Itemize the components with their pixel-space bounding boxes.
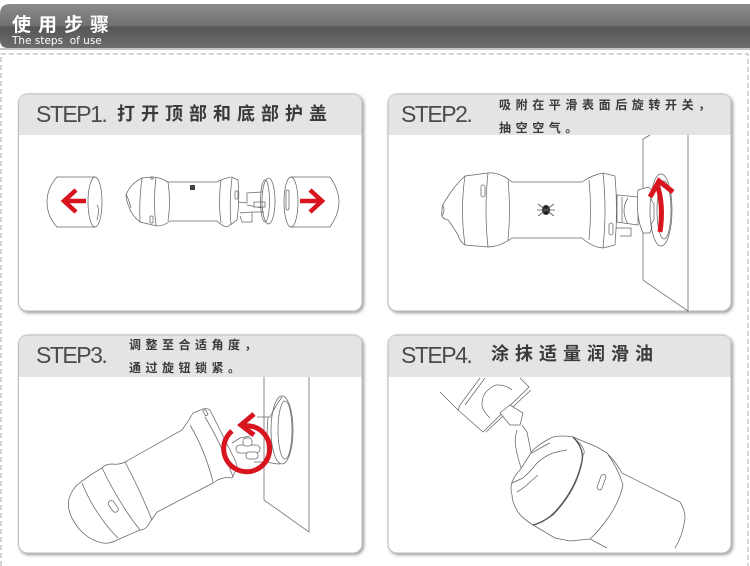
illustration: tilted device — [68, 409, 270, 543]
step 1 heading: 打开顶部和底部护盖 — [117, 103, 333, 124]
step 4 heading — [401, 342, 659, 368]
step 2 heading: STEP2. — [401, 101, 471, 127]
illustration: suction cup — [254, 396, 293, 464]
panel: step 4 — [388, 335, 731, 553]
illustration: device on wall — [442, 173, 673, 248]
step 1 heading — [36, 101, 333, 127]
step 4 heading: 涂抹适量润滑油 — [491, 343, 659, 364]
panel: step 1 — [18, 94, 362, 311]
illustration: left cap with arrow — [47, 177, 102, 227]
step 2 heading: 吸附在平滑表面后旋转开关， — [499, 97, 715, 112]
arrow: rotate tighten — [224, 414, 270, 472]
step 3 heading — [36, 337, 261, 375]
step 1 heading: STEP1. — [36, 101, 106, 127]
illustration: device being lubricated — [511, 436, 685, 548]
step 2 heading — [401, 97, 715, 135]
illustration: right cap with arrow — [284, 177, 339, 227]
header banner — [0, 4, 750, 50]
illustration: lubricant tube — [440, 378, 533, 470]
header subtitle: The steps of use — [11, 35, 102, 47]
step 4 heading: STEP4. — [401, 342, 471, 368]
arrow: rotate up — [650, 181, 673, 232]
spider logo — [537, 204, 555, 216]
arrow: right — [300, 190, 322, 212]
step 2 heading: 抽空空气。 — [499, 120, 582, 135]
panel: step 3 — [18, 335, 362, 553]
arrow: left — [64, 190, 86, 212]
panel: step 2 — [388, 94, 731, 311]
illustration: wall — [643, 135, 688, 311]
step 3 heading: 通过旋钮锁紧。 — [129, 360, 245, 375]
illustration: device without caps — [126, 177, 275, 227]
step 3 heading: STEP3. — [36, 342, 106, 368]
header title: 使用步骤 — [12, 14, 116, 36]
illustration: wall — [264, 377, 309, 532]
spider logo — [190, 185, 195, 190]
step 3 heading: 调整至合适角度， — [129, 337, 261, 352]
